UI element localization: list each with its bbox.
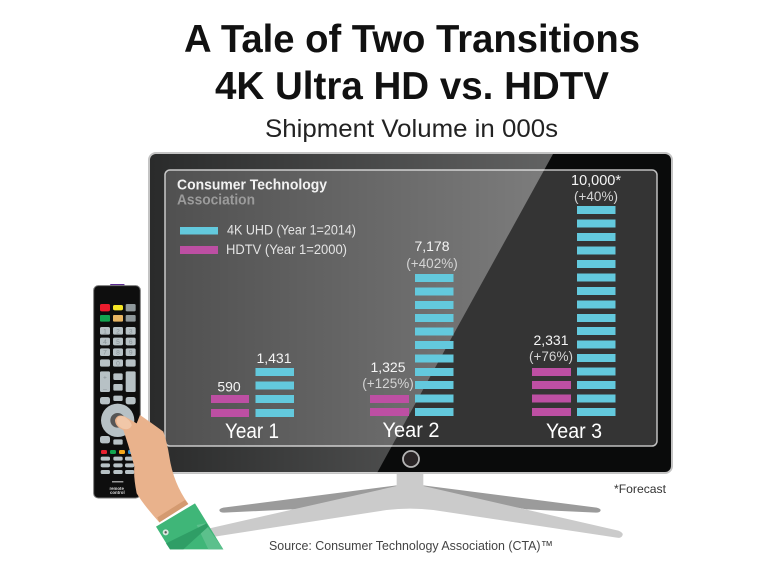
- remote control: 9: [129, 350, 133, 357]
- legend: 4K UHD (Year 1=2014): [227, 222, 356, 238]
- remote control: 5: [116, 339, 120, 346]
- remote control: 0: [116, 360, 120, 367]
- remote control: 8: [116, 350, 120, 357]
- legend: HDTV (Year 1=2000): [226, 242, 347, 257]
- year 1 bars and labels: 1,431: [256, 350, 292, 366]
- year 2 bars and labels: 7,178: [414, 238, 450, 254]
- television: [149, 153, 672, 473]
- power button: [403, 451, 419, 467]
- year 3 bars and labels: [529, 173, 621, 443]
- year 1 bars and labels: Year 1: [225, 420, 279, 443]
- hand holding remote: [115, 415, 223, 549]
- remote control: –: [103, 386, 107, 393]
- year 2 bars and labels: (+402%): [406, 256, 458, 271]
- remote control: 3: [129, 328, 133, 335]
- year 1 bars and labels: 590: [217, 378, 241, 394]
- remote control: [94, 284, 140, 498]
- remote control: remote: [109, 486, 124, 491]
- remote control: 4: [103, 339, 107, 346]
- year 3 bars and labels: Year 3: [546, 420, 602, 443]
- screen glare: [150, 154, 553, 473]
- remote control: +: [103, 374, 107, 381]
- year 2 bars and labels: 1,325: [370, 359, 406, 375]
- tv bezel: [149, 153, 672, 473]
- sleeve: [156, 503, 223, 549]
- year 3 bars and labels: 10,000*: [571, 173, 621, 189]
- year 3 bars and labels: (+76%): [529, 349, 573, 364]
- brand logo: Consumer Technology: [177, 176, 328, 194]
- year 1 bars and labels: [211, 350, 294, 443]
- brand logo: Association: [177, 192, 255, 208]
- forecast note: *Forecast: [614, 482, 667, 496]
- tv stand: [205, 472, 623, 538]
- title: 4K Ultra HD vs. HDTV: [215, 65, 609, 108]
- title: A Tale of Two Transitions: [184, 18, 640, 61]
- title: [184, 18, 640, 108]
- remote control: 7: [103, 350, 107, 357]
- remote control: 2: [116, 328, 120, 335]
- brand logo: [177, 176, 328, 208]
- remote control: 1: [103, 328, 107, 335]
- bar chart: [211, 173, 621, 443]
- year 2 bars and labels: Year 2: [382, 419, 440, 442]
- subtitle: Shipment Volume in 000s: [265, 115, 558, 143]
- remote control: 6: [129, 339, 133, 346]
- year 2 bars and labels: (+125%): [362, 376, 414, 391]
- remote control: control: [110, 490, 125, 495]
- year 2 bars and labels: [362, 238, 458, 442]
- source note: Source: Consumer Technology Association (CTA)™: [269, 538, 553, 553]
- hand: [115, 415, 188, 522]
- legend: [180, 222, 356, 257]
- year 3 bars and labels: (+40%): [574, 189, 618, 204]
- tv screen: [165, 170, 657, 446]
- year 3 bars and labels: 2,331: [533, 332, 569, 348]
